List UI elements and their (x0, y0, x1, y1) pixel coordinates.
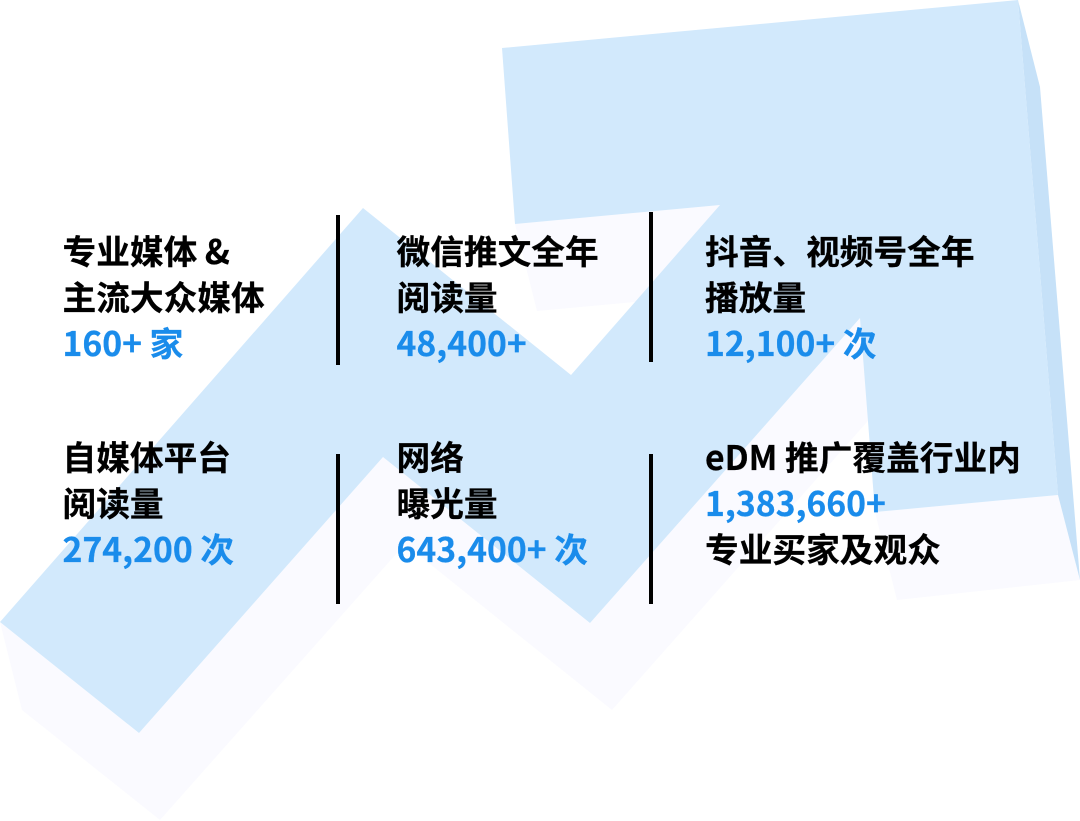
stat: media count: 专业媒体 & (62, 225, 230, 274)
arrow extrusion shadow (0, 205, 1080, 820)
divider: row 1 right (649, 212, 653, 362)
stat: media count: 160+ 家 (62, 317, 183, 366)
stat: Douyin and Channels plays: 播放量 (705, 271, 806, 320)
stat: Douyin and Channels plays: 抖音、视频号全年 (705, 225, 975, 274)
stat: self-media reads: 阅读量 (62, 477, 164, 526)
stat: online exposure: 643,400+ 次 (396, 523, 588, 572)
stat: online exposure: 网络 (396, 431, 464, 480)
stat: media count (62, 225, 265, 366)
stat: self-media reads: 274,200 次 (62, 523, 234, 572)
stat: eDM reach: 1,383,660+ (705, 477, 886, 526)
stat: self-media reads: 自媒体平台 (62, 431, 231, 480)
stat: WeChat article reads (396, 225, 599, 366)
stat: self-media reads (62, 431, 234, 572)
divider: row 2 right (649, 454, 653, 604)
stat: WeChat article reads: 微信推文全年 (396, 225, 599, 274)
stat: WeChat article reads: 48,400+ (396, 317, 527, 366)
divider: row 1 left (336, 215, 340, 365)
stat: media count: 主流大众媒体 (62, 271, 265, 320)
stat: online exposure (396, 431, 588, 572)
stat: Douyin and Channels plays (705, 225, 975, 366)
divider: row 2 left (336, 454, 340, 604)
stat: eDM reach: 专业买家及观众 (705, 523, 941, 572)
stat: WeChat article reads: 阅读量 (396, 271, 498, 320)
stat: online exposure: 曝光量 (396, 477, 498, 526)
stat: eDM reach (705, 431, 1021, 572)
stat: Douyin and Channels plays: 12,100+ 次 (705, 317, 877, 366)
stat: eDM reach: eDM 推广覆盖行业内 (705, 431, 1021, 480)
arrow right side face (1018, 0, 1080, 580)
